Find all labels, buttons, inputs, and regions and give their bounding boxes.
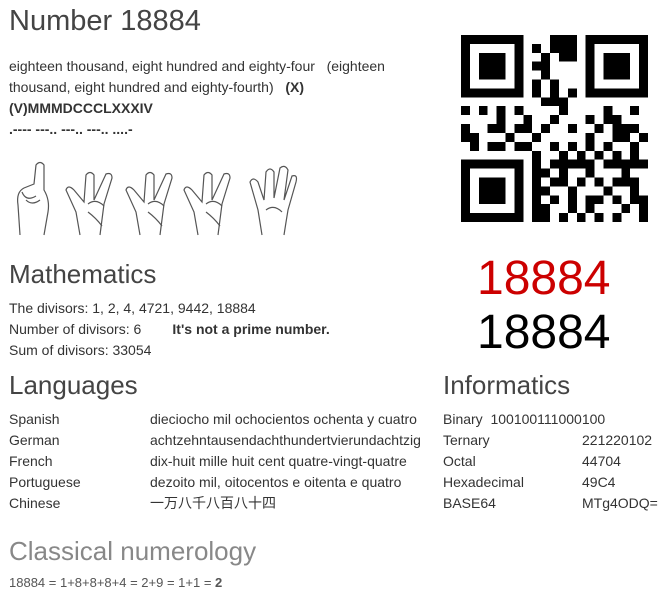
table: informatics: BASE64 xyxy=(443,495,496,511)
table: languages: dezoito mil, oitocentos e oitenta e quatro xyxy=(150,474,401,490)
heading: Mathematics: Mathematics xyxy=(9,259,156,289)
text block: numerology: 18884 = 1+8+8+8+4 = 2+9 = 1+1 = 2 xyxy=(9,575,222,590)
table: informatics: MTg4ODQ= xyxy=(582,495,658,511)
text block: number in words: eighteen thousand, eight hundred and eighty-four (eighteen xyxy=(9,58,385,74)
text block: number in words xyxy=(9,58,385,137)
text block: divisors: The divisors: 1, 2, 4, 4721, 9442, 18884 xyxy=(9,300,256,316)
table: languages: Chinese xyxy=(9,495,60,511)
text block: number in words: (V)MMMDCCCLXXXIV xyxy=(9,100,153,116)
table: languages: dix-huit mille huit cent quatre-vingt-quatre xyxy=(150,453,407,469)
heading: Classical numerology: Classical numerology xyxy=(9,536,256,566)
table: informatics: Binary 100100111000100 xyxy=(443,411,605,427)
table: informatics: Hexadecimal xyxy=(443,474,524,490)
table: informatics: Octal xyxy=(443,453,476,469)
heading: Informatics: Informatics xyxy=(443,370,570,400)
table: languages: German xyxy=(9,432,60,448)
text block: divisors: Number of divisors: 6 It's not a prime number. xyxy=(9,321,330,337)
table: languages: Portuguese xyxy=(9,474,81,490)
table: languages: Spanish xyxy=(9,411,60,427)
text block: number in words: .---- ---.. ---.. ---.. ....- xyxy=(9,121,133,137)
table: informatics: 49C4 xyxy=(582,474,615,490)
table: informatics: Ternary xyxy=(443,432,490,448)
table: informatics: 221220102 xyxy=(582,432,652,448)
table: languages: 一万八千八百八十四 xyxy=(150,495,276,511)
QR code xyxy=(461,35,648,222)
title: Number 18884 xyxy=(9,5,201,37)
text block: number in words: thousand, eight hundred and eighty-fourth) (X) xyxy=(9,79,304,95)
text block: divisors xyxy=(9,300,330,358)
table: languages xyxy=(9,411,421,511)
icon: hand signs xyxy=(17,162,298,236)
number red: 18884 xyxy=(477,252,610,305)
table: informatics: 44704 xyxy=(582,453,621,469)
table: languages: dieciocho mil ochocientos ochenta y cuatro xyxy=(150,411,417,427)
table: informatics xyxy=(443,411,658,511)
heading: Languages: Languages xyxy=(9,370,138,400)
number black: 18884 xyxy=(477,306,610,359)
table: languages: achtzehntausendachthundertvierundachtzig xyxy=(150,432,421,448)
text block: divisors: Sum of divisors: 33054 xyxy=(9,342,151,358)
table: languages: French xyxy=(9,453,53,469)
